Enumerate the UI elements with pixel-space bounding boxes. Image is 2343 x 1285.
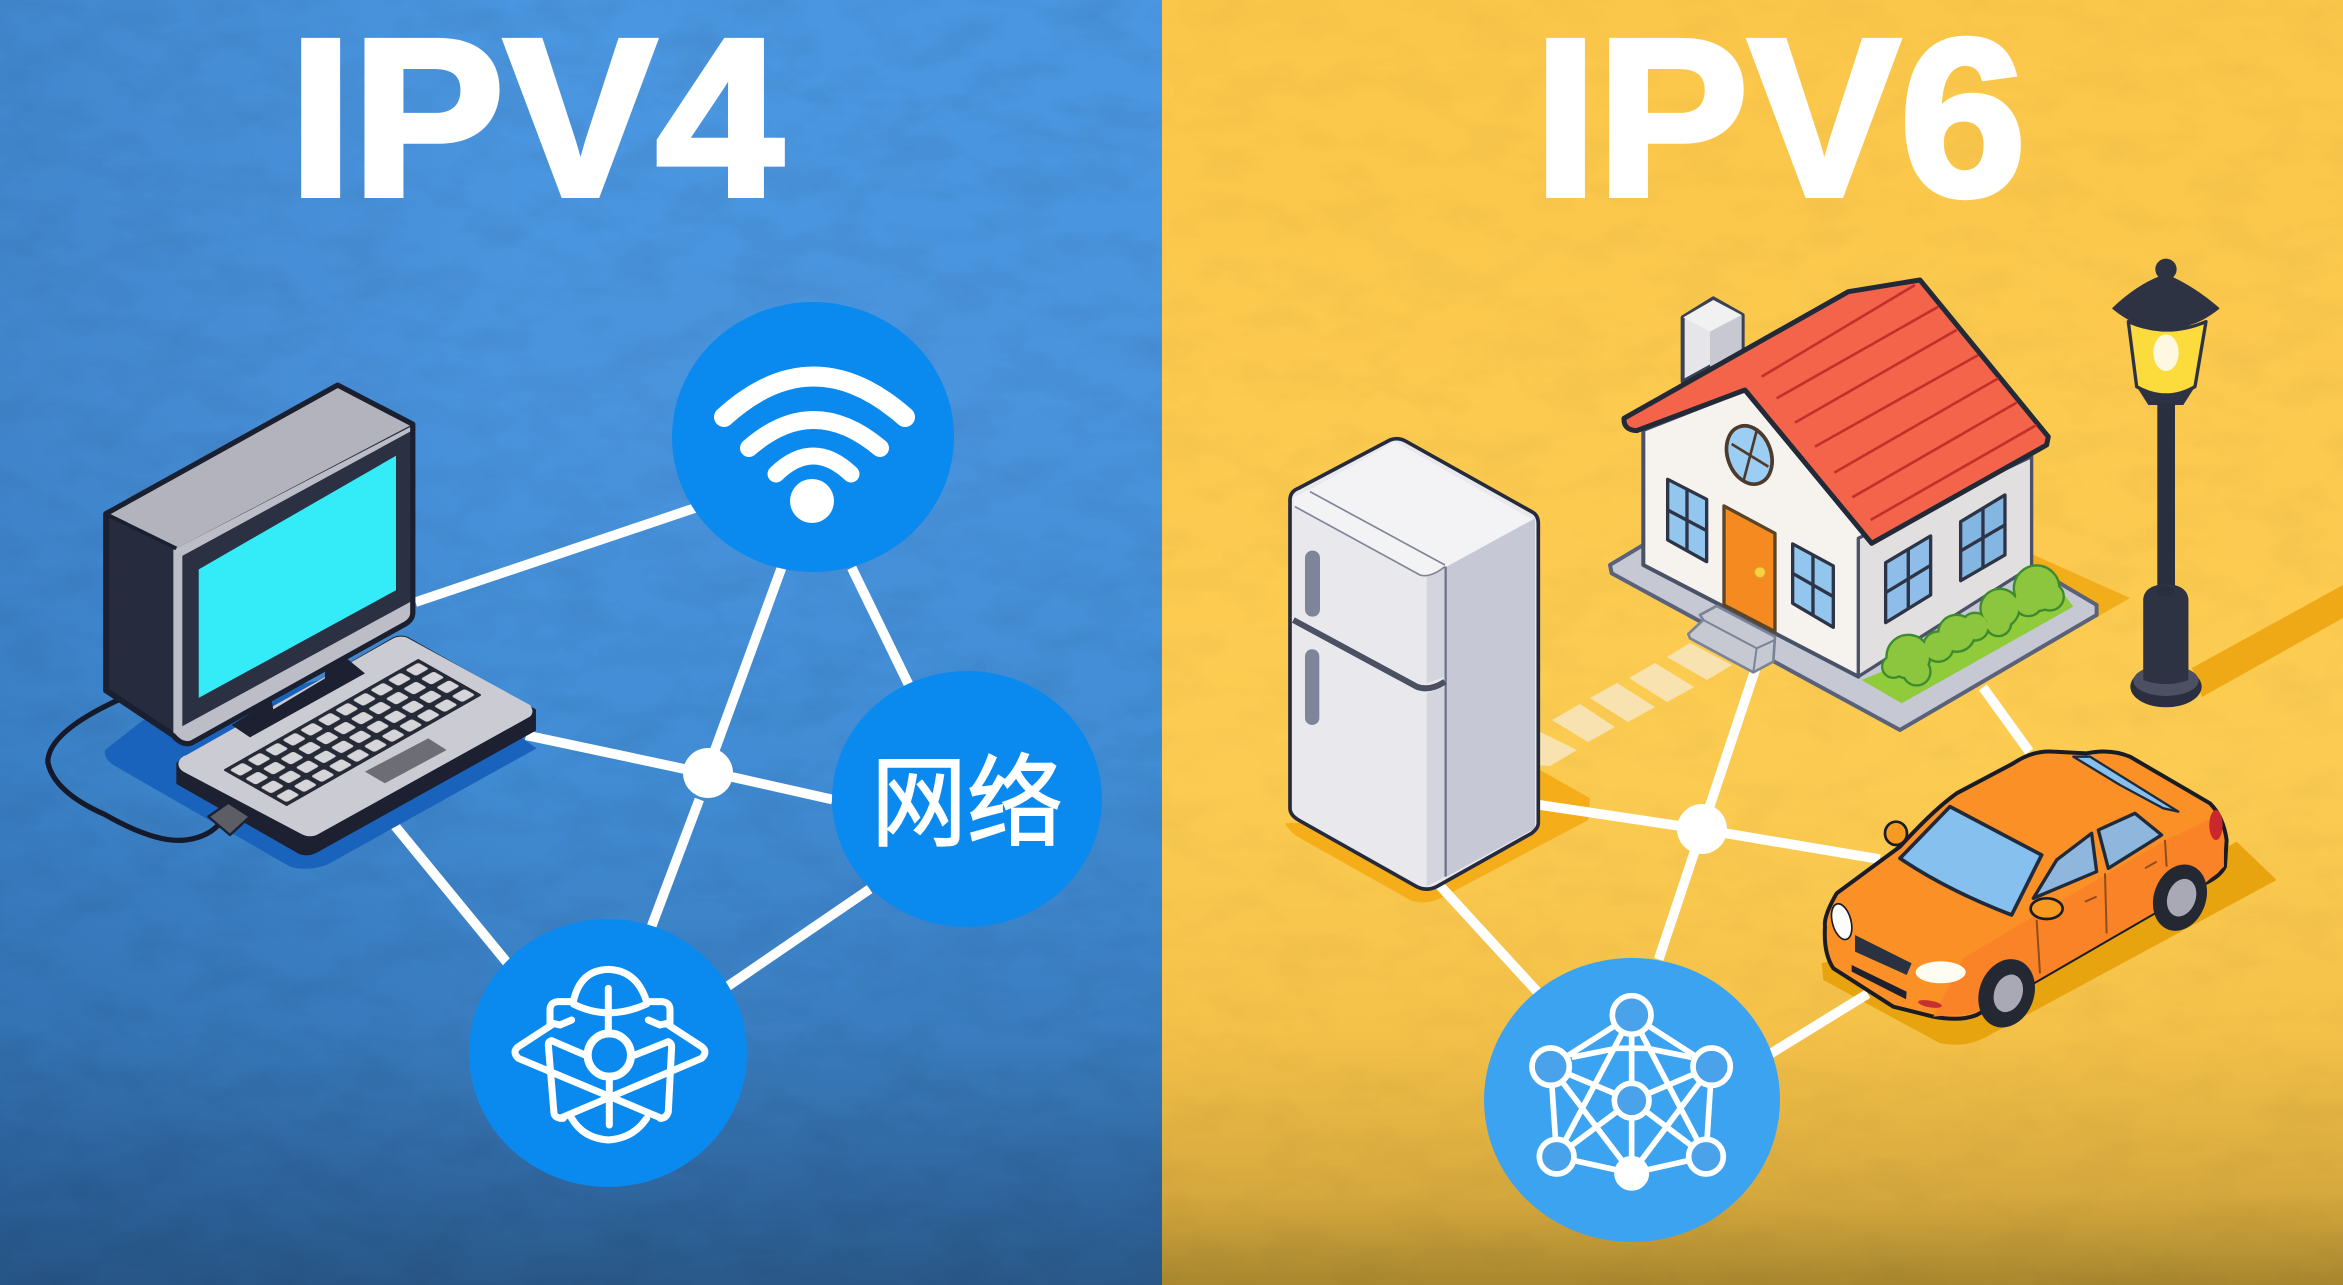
tail light (2209, 810, 2223, 840)
door lines (2037, 840, 2167, 973)
car shadow (1822, 842, 2277, 1045)
side windows (2033, 833, 2097, 898)
walls (1643, 390, 1872, 677)
house (1610, 280, 2097, 730)
windshield (1900, 807, 2042, 915)
title: IPV4: IPV4 (289, 0, 783, 243)
bushes (1883, 567, 2063, 684)
fridge shadow (1285, 770, 1590, 902)
wheels (1969, 951, 2044, 1036)
door (1724, 506, 1775, 632)
fridge top (1308, 442, 1533, 567)
network hub: IPV4 (683, 748, 733, 798)
icon: globe book (515, 969, 705, 1140)
base (1610, 545, 2097, 730)
car (1825, 751, 2227, 1036)
lamp shadow (2192, 585, 2343, 697)
path stones (1534, 643, 1732, 766)
street lamp (2113, 259, 2218, 707)
icon: mesh network (1532, 996, 1730, 1188)
mirrors (1885, 822, 1907, 845)
pole (2157, 403, 2175, 597)
network lines: IPV6 (1439, 668, 2029, 1053)
keyboard (177, 637, 535, 854)
panel: IPV4 blue side (0, 0, 1162, 1285)
floor shadow (105, 660, 537, 869)
node: wifi (672, 302, 954, 572)
car body (1825, 751, 2227, 1019)
handles (1305, 551, 1320, 617)
node: mesh network (1484, 958, 1780, 1242)
headlights (1828, 902, 1855, 942)
keys (225, 660, 480, 805)
plug (208, 803, 250, 835)
trackpad (365, 738, 447, 783)
chimney (1683, 298, 1743, 382)
icon: wifi signal (724, 376, 905, 523)
cable (48, 699, 221, 840)
attic window (1719, 419, 1780, 491)
lawn (1862, 593, 2073, 703)
computer: monitor and keyboard (48, 386, 537, 869)
label: 网络: 网络 (871, 748, 1063, 860)
monitor (106, 386, 412, 743)
fridge (1290, 439, 1538, 889)
rear window (2073, 757, 2178, 812)
node: 网络 (832, 671, 1102, 927)
fridge side (1447, 518, 1535, 877)
lamp base (2143, 584, 2188, 680)
network lines: IPV4 (386, 508, 909, 986)
lamp roof (2113, 275, 2218, 330)
monitor stand (232, 658, 365, 737)
steps (1688, 606, 1775, 672)
roof (1624, 280, 2048, 543)
house shadow (2000, 540, 2130, 617)
windows (1668, 479, 2005, 627)
grille (1855, 935, 1912, 975)
lamp glass (2128, 322, 2206, 395)
node: globe (469, 919, 747, 1187)
network hub: IPV6 (1677, 804, 1727, 854)
door divider (1293, 620, 1445, 688)
title: IPV6: IPV6 (1534, 0, 2026, 243)
panel: IPV6 yellow side (1162, 0, 2343, 1285)
